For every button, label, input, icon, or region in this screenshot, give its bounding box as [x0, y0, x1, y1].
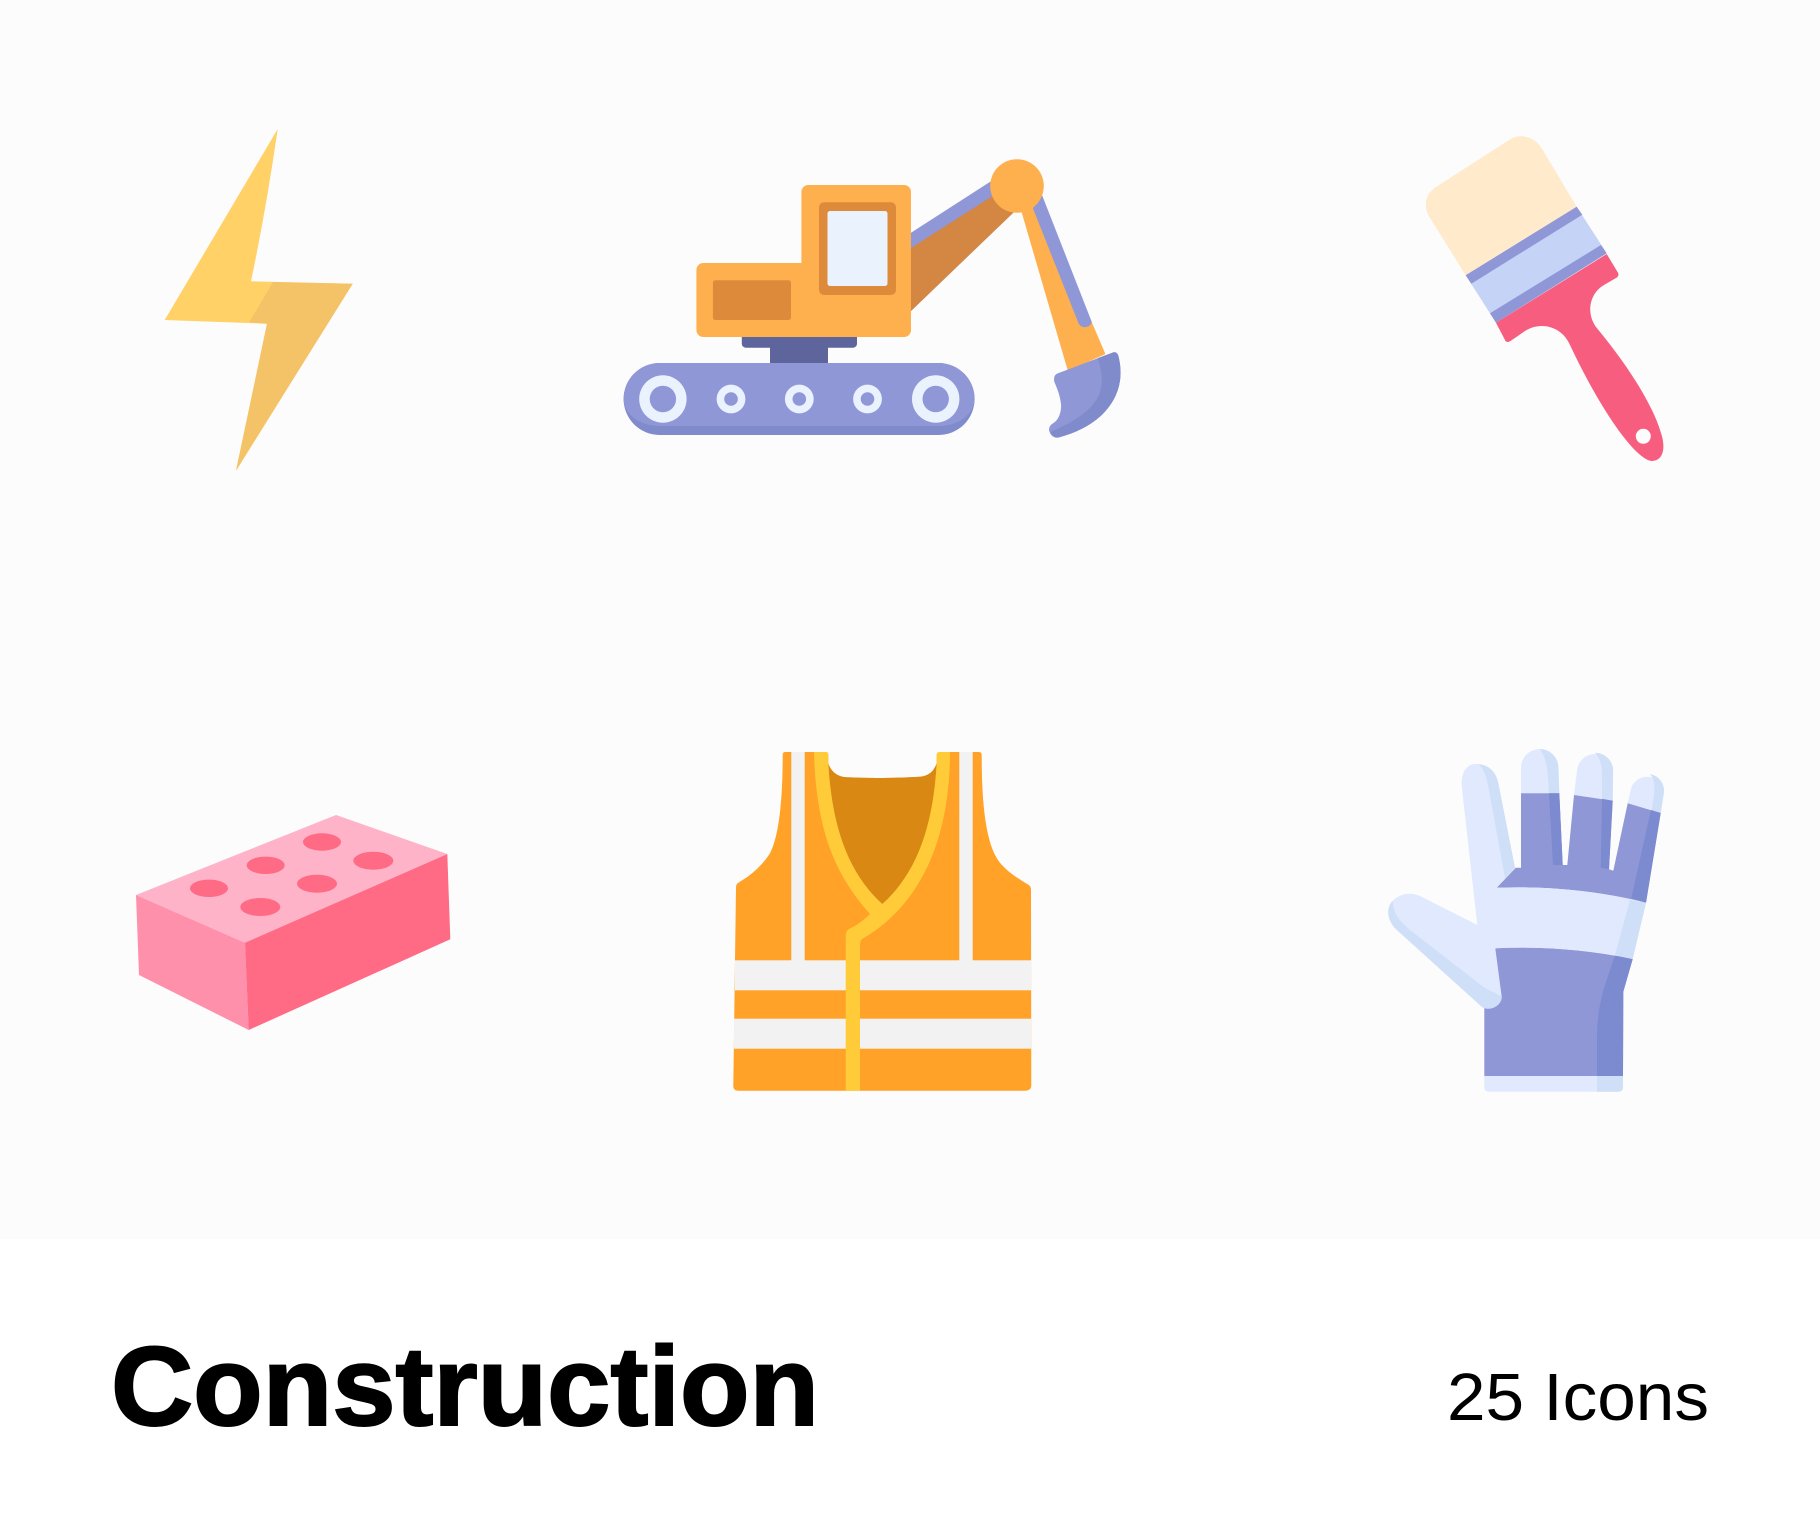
title: Construction	[111, 1324, 819, 1449]
icon: excavator	[624, 159, 1121, 438]
icon: brick	[136, 815, 450, 1030]
icon count label: 25 Icons	[1447, 1360, 1709, 1435]
icon: safety vest	[733, 752, 1031, 1091]
icon: lightning bolt	[165, 129, 353, 471]
icon: work glove	[1388, 749, 1664, 1092]
icon: paint brush	[1426, 136, 1663, 461]
